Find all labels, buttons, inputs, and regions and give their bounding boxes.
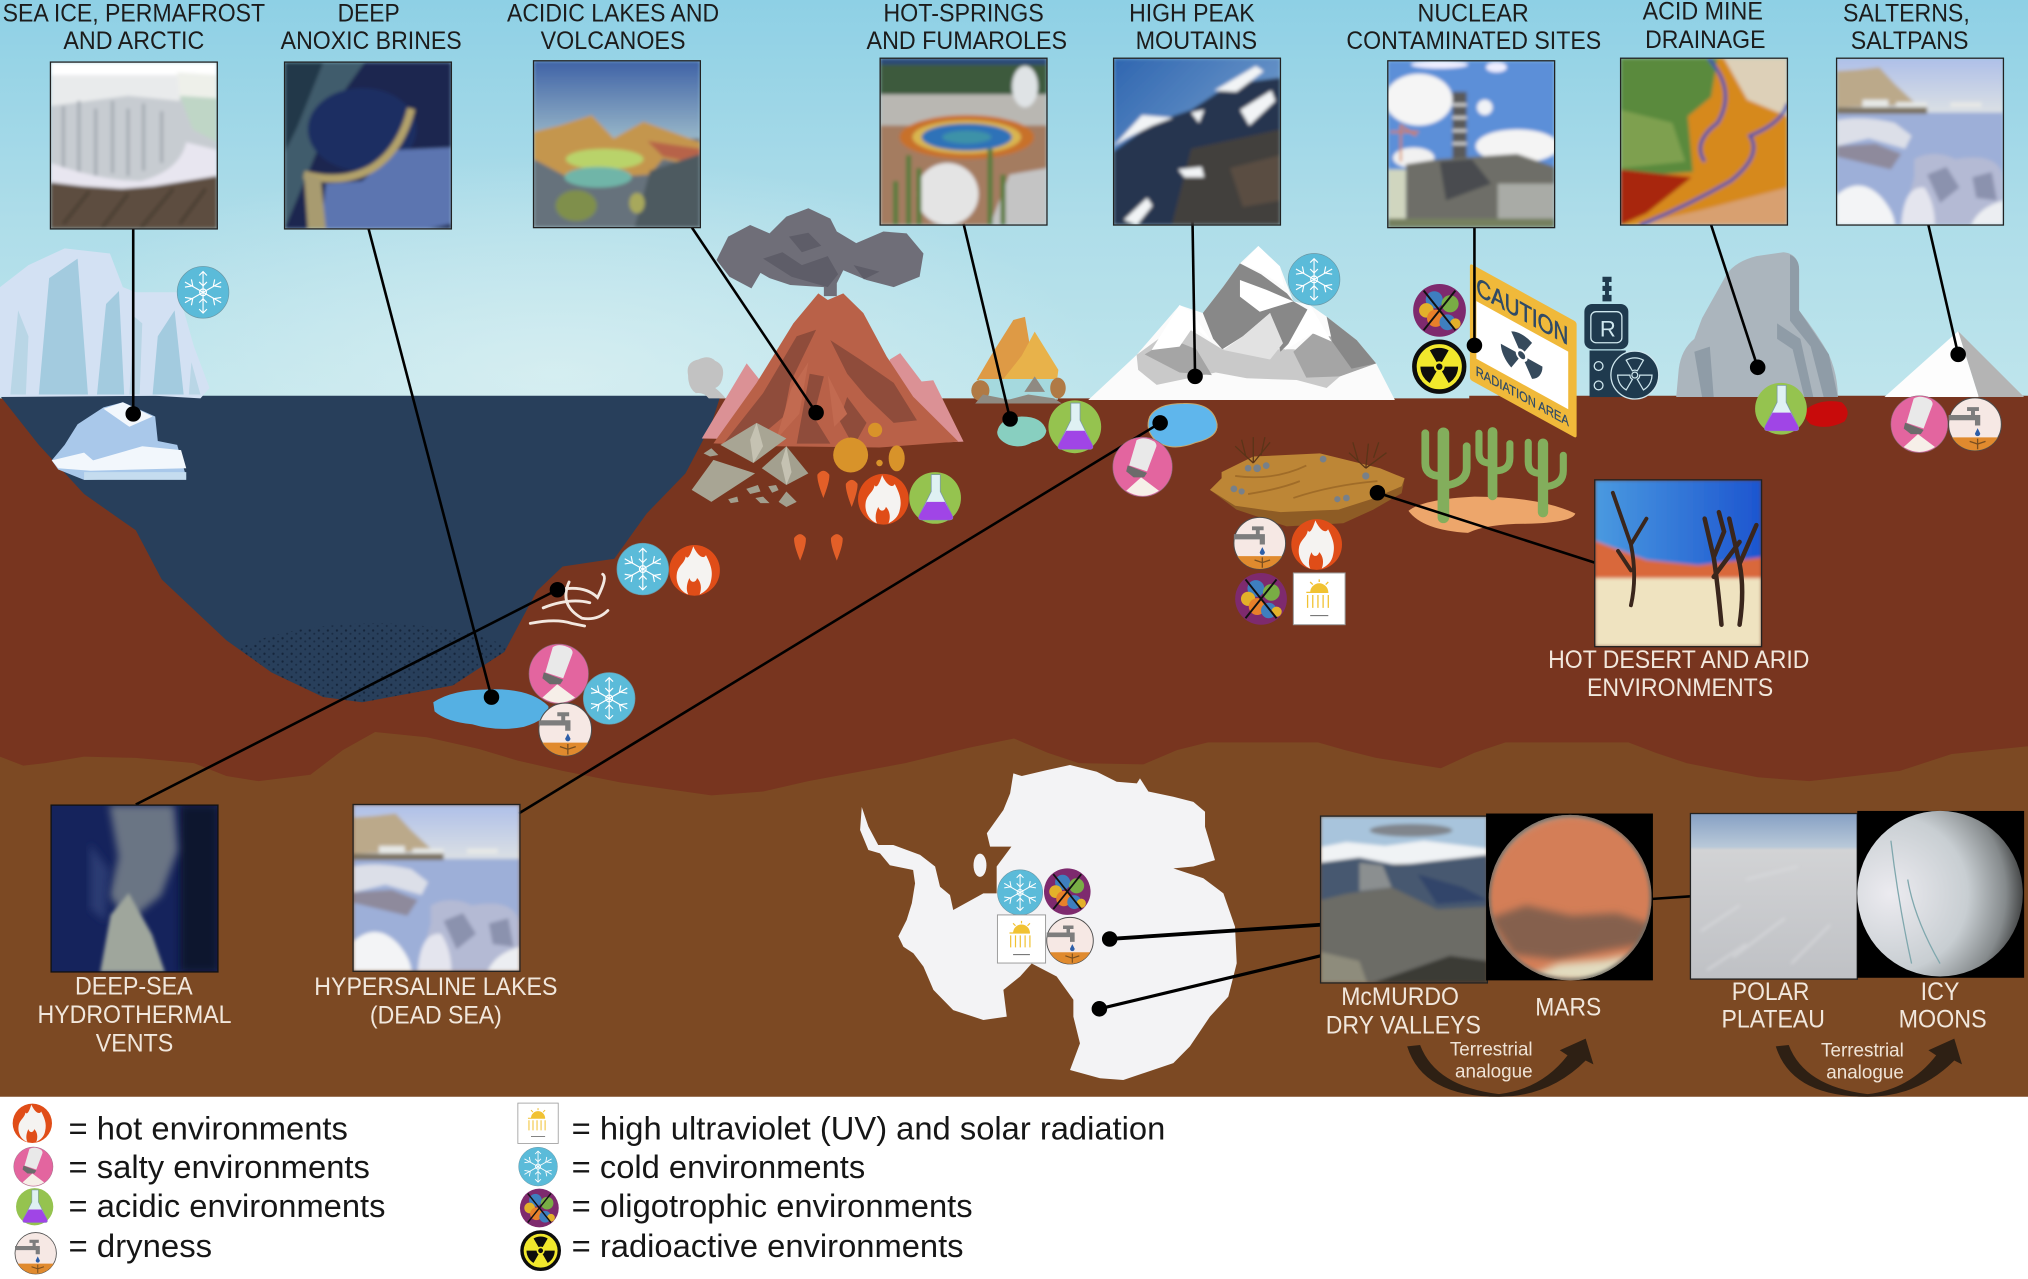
legend: oligotrophic: = oligotrophic environments bbox=[572, 1188, 973, 1224]
illustration: blue glacial lake bbox=[1148, 403, 1217, 447]
heading: high peak: HIGH PEAK bbox=[1129, 0, 1255, 27]
label: hot desert: HOT DESERT AND ARID bbox=[1548, 647, 1809, 674]
label: McMurdo dry valleys: DRY VALLEYS bbox=[1326, 1012, 1481, 1039]
heading: salterns: SALTERNS, bbox=[1843, 0, 1970, 27]
illustration: salt heap bbox=[1884, 331, 2024, 397]
illustration: caution radiation sign bbox=[1470, 263, 1577, 438]
photo: hydrothermal vent bbox=[51, 805, 218, 972]
label: polar plateau: PLATEAU bbox=[1721, 1007, 1825, 1034]
illustration: hot spring pond bbox=[997, 416, 1046, 446]
label: hydrothermal vents: DEEP-SEA bbox=[75, 974, 193, 1001]
photo: McMurdo dry valleys bbox=[1321, 816, 1487, 983]
background: sky bbox=[0, 0, 2028, 595]
heading: hot springs bbox=[867, 0, 1067, 55]
legend: acidic: = acidic environments bbox=[69, 1188, 385, 1224]
map: Antarctica bbox=[860, 765, 1237, 1080]
heading: nuclear bbox=[1346, 0, 1601, 55]
background: white legend area bbox=[0, 1097, 2028, 1279]
illustration: grey rock outcrop bbox=[1676, 252, 1838, 397]
illustration: acid mine red pool bbox=[1805, 401, 1848, 427]
illustration: floating ice block bbox=[52, 402, 186, 480]
label: hypersaline lakes: (DEAD SEA) bbox=[370, 1003, 502, 1030]
photo: hot desert bbox=[1595, 480, 1762, 647]
legend: ultraviolet: = high ultraviolet (UV) and solar radiation bbox=[572, 1110, 1165, 1146]
heading: nuclear: CONTAMINATED SITES bbox=[1346, 28, 1601, 55]
label: McMurdo dry valleys bbox=[1326, 984, 1481, 1039]
illustration: small steam puff bbox=[688, 357, 726, 398]
legend: dryness: = dryness bbox=[69, 1228, 212, 1264]
illustration: volcano bbox=[702, 293, 964, 448]
illustration: rocks bbox=[692, 423, 808, 507]
photo: hypersaline lake bbox=[353, 804, 520, 971]
label: icy moons: MOONS bbox=[1899, 1007, 1987, 1034]
illustration: volcanic smoke plume bbox=[717, 208, 923, 296]
legend: hot bbox=[13, 1104, 348, 1146]
ground: upper soil layer bbox=[0, 396, 2028, 802]
heading: acid mine drainage: DRAINAGE bbox=[1645, 27, 1765, 54]
legend: salty: = salty environments bbox=[69, 1149, 370, 1185]
illustration: brine pool bbox=[433, 689, 548, 729]
illustration: hydrothermal vent wisps bbox=[530, 574, 608, 626]
illustration: radiation detector bbox=[1584, 277, 1659, 399]
photo: sea ice bbox=[50, 62, 217, 229]
legend: cold: = cold environments bbox=[572, 1149, 865, 1185]
label: hydrothermal vents: VENTS bbox=[96, 1030, 173, 1057]
legend bbox=[13, 1103, 1165, 1274]
illustration: sulphur and lava drops bbox=[794, 423, 905, 561]
photo: polar plateau bbox=[1690, 814, 1857, 979]
label: hypersaline lakes bbox=[314, 974, 557, 1030]
heading: sea ice: AND ARCTIC bbox=[63, 28, 204, 55]
label: icy moons bbox=[1899, 979, 1987, 1034]
illustration: cacti bbox=[1425, 432, 1563, 517]
photo: acidic lake volcano bbox=[534, 61, 700, 228]
photo: high peak mountains bbox=[1114, 58, 1280, 225]
heading: deep anoxic brines: DEEP bbox=[338, 0, 400, 27]
illustration: caution radiation sign: RADIATION AREA bbox=[1476, 364, 1569, 430]
label: hot desert bbox=[1548, 647, 1809, 702]
photo: icy moon bbox=[1857, 811, 2024, 978]
label: polar plateau: POLAR bbox=[1732, 979, 1809, 1006]
heading: hot springs: HOT-SPRINGS bbox=[883, 0, 1044, 27]
illustration: large iceberg bbox=[0, 248, 210, 398]
arrow: terrestrial analogue, icy moons: Terrestrial bbox=[1821, 1040, 1904, 1062]
illustration: sand dune bbox=[1408, 497, 1575, 533]
heading: deep anoxic brines bbox=[281, 0, 462, 55]
label: hypersaline lakes: HYPERSALINE LAKES bbox=[314, 974, 557, 1001]
photo: salterns bbox=[1837, 58, 2003, 225]
label: McMurdo dry valleys: McMURDO bbox=[1341, 984, 1459, 1011]
illustration: cracked desert plate bbox=[1210, 437, 1405, 526]
heading: sea ice bbox=[3, 0, 265, 55]
arrow: terrestrial analogue, icy moons bbox=[1776, 1039, 1962, 1097]
label: icy moons: ICY bbox=[1921, 979, 1959, 1006]
heading: deep anoxic brines: ANOXIC BRINES bbox=[281, 28, 462, 55]
photo: nuclear site bbox=[1385, 61, 1559, 228]
heading: salterns bbox=[1843, 0, 1970, 55]
heading: high peak: MOUTAINS bbox=[1136, 28, 1257, 55]
photo: Mars bbox=[1486, 802, 1656, 983]
arrow: terrestrial analogue, Mars: analogue bbox=[1455, 1060, 1533, 1082]
heading: high peak bbox=[1129, 0, 1257, 55]
arrow: terrestrial analogue, Mars bbox=[1407, 1038, 1593, 1097]
heading: hot springs: AND FUMAROLES bbox=[867, 28, 1067, 55]
label: hydrothermal vents: HYDROTHERMAL bbox=[38, 1002, 232, 1029]
illustration: high peak mountains bbox=[1088, 246, 1395, 400]
illustration: caution radiation sign: CAUTION bbox=[1476, 272, 1568, 351]
photo: deep anoxic brines bbox=[285, 62, 451, 229]
illustration: radiation detector: R bbox=[1600, 316, 1616, 341]
heading: acidic lakes: ACIDIC LAKES AND bbox=[507, 0, 719, 27]
heading: nuclear: NUCLEAR bbox=[1418, 0, 1529, 27]
legend: dryness bbox=[15, 1228, 212, 1274]
photo: hot spring bbox=[880, 58, 1047, 225]
heading: acid mine drainage bbox=[1643, 0, 1765, 54]
label: hot desert: ENVIRONMENTS bbox=[1587, 675, 1773, 702]
arrow: terrestrial analogue, Mars: Terrestrial bbox=[1450, 1038, 1533, 1060]
ground: lower soil layer bbox=[0, 732, 2028, 1097]
heading: sea ice: SEA ICE, PERMAFROST bbox=[3, 0, 265, 27]
label: polar plateau bbox=[1721, 979, 1825, 1034]
photo: acid mine drainage bbox=[1621, 58, 1787, 225]
legend: hot: = hot environments bbox=[69, 1110, 348, 1146]
heading: salterns: SALTPANS bbox=[1851, 28, 1969, 55]
leader lines and marker dots bbox=[127, 220, 1965, 1015]
illustration: hot spring mound bbox=[971, 317, 1066, 404]
heading: acidic lakes bbox=[507, 0, 719, 55]
arrow: terrestrial analogue, icy moons: analogue bbox=[1826, 1062, 1904, 1084]
icons placed on the scene bbox=[177, 253, 2001, 964]
heading: acidic lakes: VOLCANOES bbox=[541, 28, 685, 55]
legend: radioactive: = radioactive environments bbox=[572, 1228, 964, 1264]
label: Mars: MARS bbox=[1535, 994, 1601, 1021]
label: hydrothermal vents bbox=[38, 974, 232, 1057]
sea: deep ocean basin bbox=[0, 396, 720, 722]
